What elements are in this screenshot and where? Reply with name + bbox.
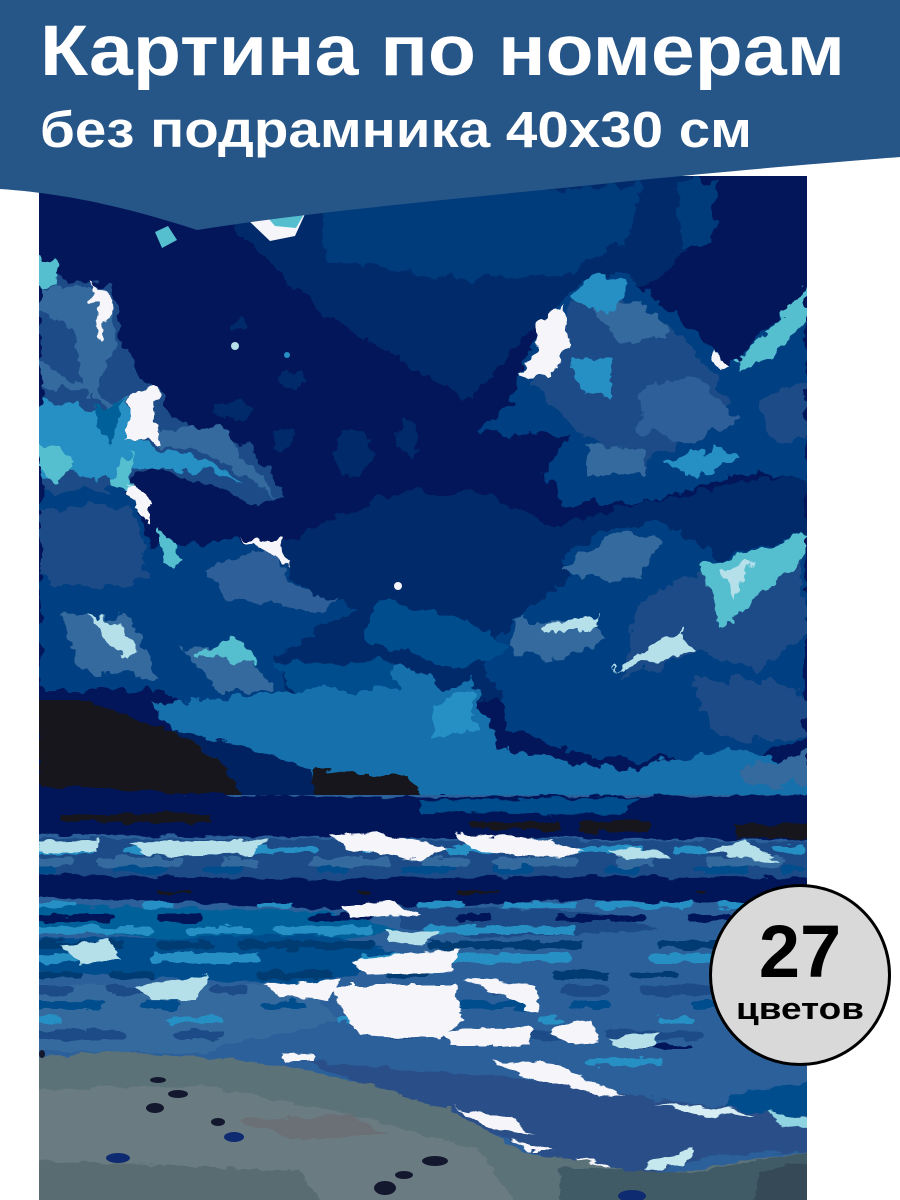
left lower cloud masses	[39, 485, 358, 706]
moonlight highlights	[39, 832, 807, 1175]
patchy wave strokes	[30, 850, 800, 1062]
painting: moonlit sea and clouds	[20, 170, 830, 1200]
right lower cloud	[478, 520, 807, 760]
night sky	[39, 170, 807, 810]
badge: 27 colours: 27	[759, 910, 841, 993]
badge: 27 colours: цветов	[736, 991, 864, 1026]
left upper cloud	[39, 255, 284, 524]
small cloud details	[155, 214, 402, 590]
badge: 27 colours	[710, 886, 890, 1064]
darker-blue sky patches	[215, 170, 807, 700]
header banner	[0, 0, 900, 230]
subtitle: без подрамника 40х30 см	[40, 101, 752, 158]
headland	[39, 700, 420, 795]
beach	[20, 1052, 830, 1200]
title: Картина по номерам	[40, 12, 845, 91]
sea	[20, 785, 830, 1185]
horizon glow	[150, 600, 807, 800]
beach pebbles	[39, 1050, 646, 1200]
right upper cloud	[475, 272, 807, 503]
